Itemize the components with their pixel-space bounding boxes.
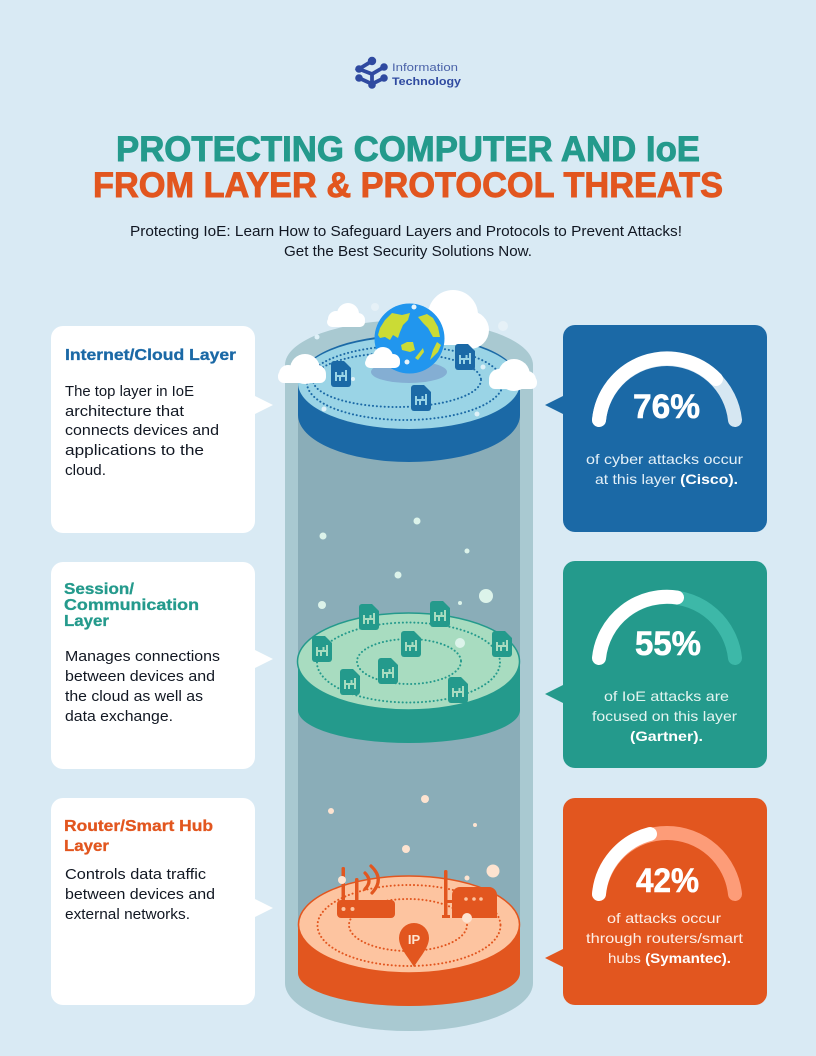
- clouds: [278, 303, 537, 391]
- panel: session description: [51, 562, 273, 769]
- heading: Router/Smart Hub: [64, 818, 213, 835]
- body text: data exchange.: [65, 709, 173, 725]
- panel: internet cloud description: [51, 326, 273, 533]
- title: [93, 130, 723, 205]
- particles on disk: [314, 334, 486, 416]
- icons: sim chips: [331, 344, 475, 411]
- panel: 76 percent stat: [545, 325, 767, 532]
- body text: architecture that: [65, 404, 184, 420]
- heading: Session/: [64, 581, 135, 598]
- disk: internet cloud layer: [278, 290, 537, 462]
- value: 42%: [636, 862, 699, 900]
- value: 76%: [633, 388, 700, 426]
- body text: [65, 867, 215, 923]
- caption: of IoE attacks are: [604, 688, 729, 704]
- big cloud behind globe: [420, 290, 489, 349]
- subtitle: Get the Best Security Solutions Now.: [284, 244, 532, 260]
- icon: ip location pin: IP: [408, 932, 420, 947]
- floating particles: bottom: [328, 795, 500, 880]
- body text: the cloud as well as: [65, 689, 203, 705]
- icon: wifi router: [337, 866, 395, 918]
- caption: [586, 910, 743, 966]
- subtitle: Protecting IoE: Learn How to Safeguard Layers and Protocols to Prevent Attacks!: [130, 224, 682, 240]
- body text: connects devices and: [65, 423, 219, 439]
- body text: Manages connections: [65, 649, 220, 665]
- body text: The top layer in IoE: [65, 384, 194, 400]
- body text: between devices and: [65, 887, 215, 903]
- disk: router smart hub layer: [298, 866, 520, 1006]
- orbit rings: [317, 622, 500, 702]
- gauge: [599, 358, 735, 420]
- logo: [355, 57, 462, 89]
- caption: of cyber attacks occur: [586, 451, 743, 467]
- orbit rings: [307, 346, 503, 420]
- panel: router description: [51, 798, 273, 1005]
- body text: external networks.: [65, 907, 190, 923]
- floating particles: middle: [318, 518, 493, 609]
- heading: [64, 818, 213, 855]
- body text: [65, 384, 219, 479]
- value: 55%: [635, 625, 701, 663]
- icon: logo network: [355, 57, 388, 89]
- heading: Layer: [64, 613, 109, 630]
- body text: [65, 649, 220, 725]
- body text: applications to the: [65, 443, 204, 459]
- logo wordmark: [392, 62, 462, 88]
- body text: cloud.: [65, 463, 106, 479]
- body text: Controls data traffic: [65, 867, 206, 883]
- caption: hubs (Symantec).: [608, 950, 731, 966]
- panel: 42 percent stat: [545, 798, 767, 1005]
- heading: Communication: [64, 597, 199, 614]
- caption: through routers/smart: [586, 930, 743, 946]
- orbit rings: [318, 885, 500, 966]
- disk: session communication layer: [298, 601, 520, 743]
- logo wordmark: Technology: [392, 76, 462, 88]
- heading: [64, 581, 199, 630]
- heading: Internet/Cloud Layer: [65, 347, 236, 364]
- caption: [592, 688, 737, 744]
- body text: between devices and: [65, 669, 215, 685]
- icon: globe: [374, 304, 444, 374]
- caption: [586, 451, 743, 487]
- globe shadow: [371, 361, 447, 383]
- title: PROTECTING COMPUTER AND IoE: [116, 130, 700, 169]
- caption: of attacks occur: [607, 910, 721, 926]
- icon: ip location pin: [399, 923, 429, 967]
- logo wordmark: Information: [392, 62, 458, 74]
- caption: focused on this layer: [592, 708, 737, 724]
- gauge: [599, 597, 735, 658]
- icon: hub device: [442, 870, 497, 923]
- subtitle: [130, 224, 682, 260]
- icons: sim chips: [312, 601, 512, 703]
- faint particles above disk: [371, 303, 508, 331]
- caption: at this layer (Cisco).: [595, 471, 738, 487]
- particle on disk: [455, 638, 465, 648]
- title: FROM LAYER & PROTOCOL THREATS: [93, 166, 723, 205]
- cylinder: [285, 320, 533, 1031]
- caption: (Gartner).: [630, 728, 703, 744]
- panel: 55 percent stat: [545, 561, 767, 768]
- heading: Layer: [64, 838, 109, 855]
- gauge: [599, 833, 735, 894]
